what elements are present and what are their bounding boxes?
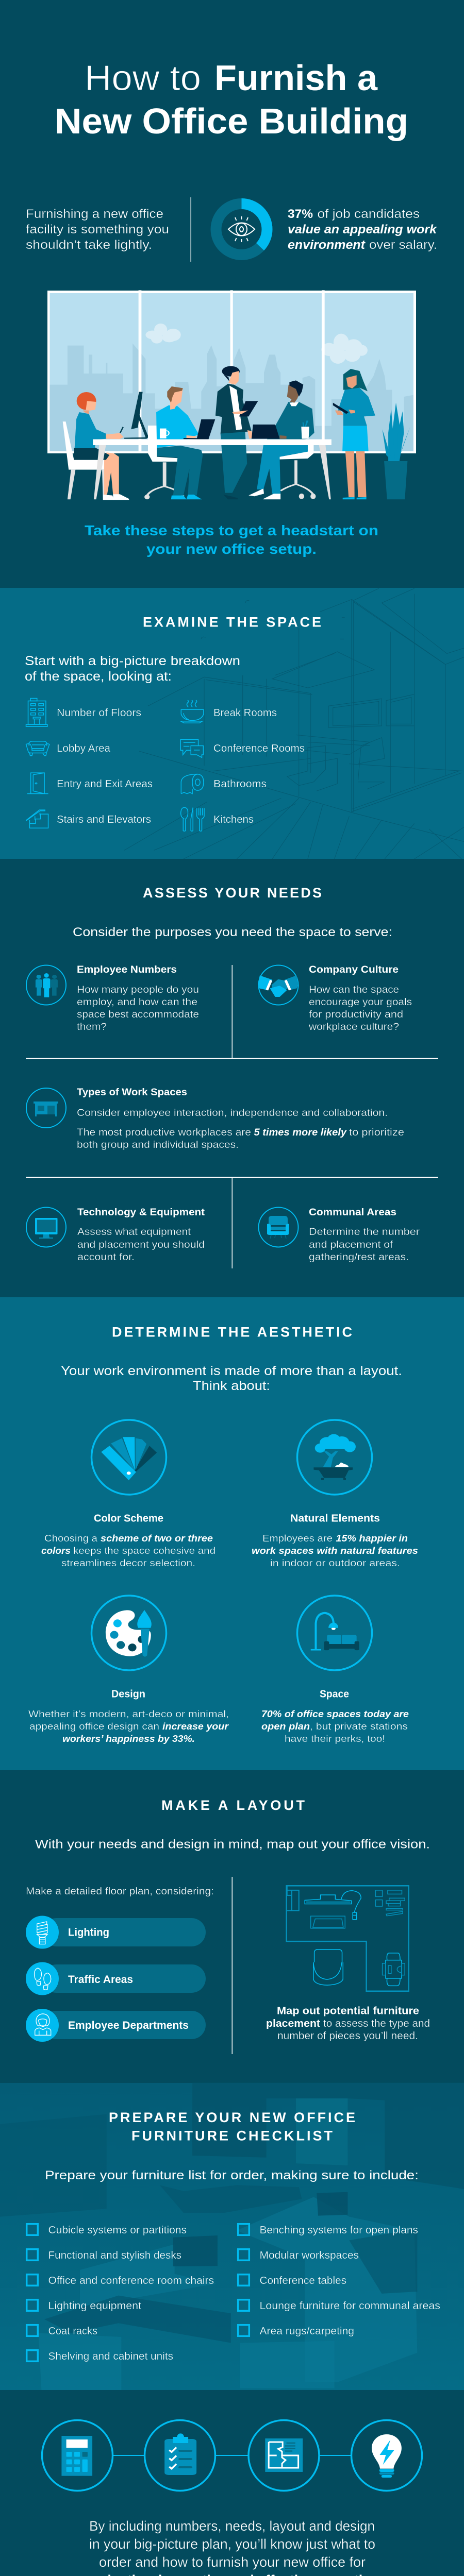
- text: 15% happier in: [336, 1533, 408, 1544]
- text: appealing office design can: [29, 1721, 159, 1732]
- cabinets: [287, 1886, 299, 1910]
- floor plan caption: placement: [266, 2018, 320, 2029]
- person: seated man in blue: [144, 386, 215, 499]
- text: keeps the space cohesive and: [73, 1545, 216, 1556]
- icon: monitor: [124, 392, 148, 439]
- panel: assess your needs: [0, 859, 464, 1297]
- text: streamlines decor selection.: [61, 1557, 195, 1568]
- floor plan drawing: [287, 1886, 409, 1991]
- text: Communal Areas: [309, 1207, 396, 1218]
- conclusion text: order and how to furnish your new office for: [99, 2554, 366, 2570]
- lead text: Start with a big-picture breakdown: [25, 654, 240, 668]
- text: space best accommodate: [77, 1009, 199, 1020]
- text: Consider employee interaction, independence and collaboration.: [77, 1108, 388, 1118]
- icon: footprints: [35, 1968, 51, 1990]
- icon: light bulb: [352, 2420, 422, 2490]
- text: [77, 1207, 205, 1263]
- text: both group and individual spaces.: [77, 1140, 239, 1150]
- person: seated man in sweater: [248, 380, 316, 499]
- icon: coffee cup: [180, 700, 204, 723]
- text: open plan: [261, 1721, 310, 1732]
- text: [309, 1207, 420, 1263]
- text: workplace culture?: [308, 1022, 399, 1032]
- label: Employee Departments: [68, 2020, 189, 2031]
- card: company culture: [258, 964, 412, 1032]
- text: [41, 1533, 216, 1568]
- text: Employees are: [262, 1533, 333, 1544]
- panel: examine the space: [0, 588, 464, 859]
- icon: eye: [228, 216, 255, 242]
- icon: employee: [35, 2014, 51, 2035]
- text: encourage your goals: [309, 997, 412, 1008]
- subheading: take these steps: Take these steps to get a headstart on: [85, 522, 378, 538]
- text: workers’ happiness by 33%.: [62, 1733, 195, 1744]
- text: and placement you should: [77, 1240, 205, 1250]
- icon: door: [27, 773, 48, 794]
- lead text: Prepare your furniture list for order, making sure to include:: [45, 2168, 419, 2182]
- list: spaces right column: Conference Rooms: [213, 743, 305, 754]
- heading: ASSESS YOUR NEEDS: [143, 885, 322, 901]
- text: account for.: [77, 1252, 135, 1263]
- pill: employee departments: [26, 2009, 206, 2042]
- conclusion text: [81, 2518, 383, 2576]
- checklist left column: [27, 2224, 214, 2362]
- lead text: With your needs and design in mind, map out your office vision.: [35, 1837, 430, 1852]
- text: [308, 964, 412, 1032]
- checklist right column: [238, 2224, 440, 2337]
- title: Furnish a: [214, 58, 378, 98]
- label: Space: [320, 1689, 349, 1700]
- title: How to: [85, 58, 201, 98]
- list: spaces right column: Kitchens: [213, 814, 254, 825]
- text: have their perks, too!: [285, 1733, 385, 1744]
- person: woman with red hair: [63, 392, 129, 500]
- text: Determine the number: [309, 1227, 420, 1238]
- text: Technology & Equipment: [77, 1207, 205, 1218]
- checklist right column: Benching systems for open plans: [260, 2225, 418, 2236]
- divider: [232, 1877, 233, 2054]
- label: Design: [111, 1689, 145, 1700]
- stat text: over salary.: [369, 238, 437, 252]
- plant: [383, 403, 410, 499]
- card: types of work spaces: [26, 1087, 404, 1150]
- text: Choosing a: [44, 1533, 98, 1544]
- person: standing woman in blue dress: [333, 369, 375, 499]
- text: scheme of two or three: [101, 1533, 213, 1544]
- icon: desk: [34, 1101, 58, 1116]
- text: 5 times more likely: [254, 1127, 347, 1138]
- list: spaces left column: Entry and Exit Areas: [57, 778, 153, 790]
- item: natural elements: [252, 1420, 418, 1568]
- panel: furniture checklist: [0, 2082, 464, 2390]
- heading: FURNITURE CHECKLIST: [131, 2128, 333, 2143]
- pill: lighting: [26, 1916, 206, 1948]
- illustration: office window: [47, 290, 416, 500]
- text: How many people do you: [77, 985, 199, 995]
- floor plan prompt: Make a detailed floor plan, considering:: [26, 1886, 214, 1897]
- checklist right column: Modular workspaces: [260, 2250, 359, 2261]
- stat text: environment: [288, 238, 366, 252]
- text: employ, and how can the: [77, 997, 197, 1008]
- sofa and coffee table: [305, 1891, 361, 1920]
- list: spaces left column: Lobby Area: [57, 743, 111, 754]
- text: for productivity and: [309, 1009, 403, 1020]
- lead text: of the space, looking at:: [25, 669, 172, 684]
- icon: calculator: [42, 2420, 112, 2490]
- intro text: shouldn’t take lightly.: [26, 238, 152, 252]
- icon: clipboard: [144, 2420, 216, 2490]
- text: Company Culture: [309, 964, 399, 975]
- checklist right column: Lounge furniture for communal areas: [260, 2300, 440, 2312]
- checklist left column: Office and conference room chairs: [48, 2275, 214, 2286]
- shelving: [375, 1890, 405, 1916]
- person: standing woman with tablet: [216, 366, 258, 499]
- checklist left column: Lighting equipment: [48, 2300, 141, 2312]
- title: [55, 58, 408, 141]
- icon: sofa: [26, 741, 49, 756]
- list: spaces left column: Stairs and Elevators: [57, 814, 151, 825]
- text: them?: [77, 1022, 107, 1032]
- donut chart: 37%: [216, 204, 267, 255]
- title: New Office Building: [55, 101, 408, 141]
- intro text: facility is something you: [26, 223, 169, 236]
- label: Traffic Areas: [68, 1974, 133, 1986]
- text: [28, 1708, 229, 1744]
- table: [311, 1916, 345, 1928]
- armchair: [313, 1950, 343, 1985]
- text: , but private stations: [310, 1721, 408, 1732]
- text: Assess what equipment: [77, 1227, 191, 1238]
- icon: bonsai: [313, 1434, 356, 1480]
- icon: monitor: [35, 1218, 58, 1239]
- text: work spaces with natural features: [252, 1545, 418, 1556]
- desk chair: [386, 1953, 402, 1986]
- table: [93, 439, 332, 499]
- text: Types of Work Spaces: [77, 1087, 187, 1098]
- icon: handshake: [258, 975, 299, 997]
- text: colors: [41, 1545, 71, 1556]
- intro text: [26, 207, 169, 252]
- text: to prioritize: [349, 1127, 404, 1138]
- text: [261, 1708, 409, 1744]
- item: space: [261, 1596, 409, 1744]
- checklist left column: Shelving and cabinet units: [48, 2351, 173, 2362]
- label: Color Scheme: [94, 1513, 163, 1524]
- list: spaces right column: Break Rooms: [213, 707, 277, 719]
- panel: intro background: [0, 0, 464, 588]
- label: Lighting: [68, 1927, 109, 1938]
- lead text: Consider the purposes you need the space to serve:: [73, 925, 392, 939]
- subheading: take these steps: [85, 522, 378, 557]
- item: design: [28, 1596, 229, 1744]
- floor plan caption: Map out potential furniture: [277, 2005, 419, 2016]
- icon: lamp and sofa: [311, 1613, 359, 1651]
- text: Whether it’s modern, art-deco or minimal,: [28, 1708, 229, 1719]
- stat text: [288, 207, 438, 252]
- panel: conclusion: [0, 2390, 464, 2576]
- text: in indoor or outdoor areas.: [270, 1557, 400, 1568]
- dividers: [26, 965, 438, 1268]
- lead text: [61, 1364, 402, 1393]
- connectors: [113, 2455, 351, 2456]
- text: increase your: [162, 1721, 229, 1732]
- icon: armchair: [267, 1216, 289, 1239]
- checklist left column: Functional and stylish desks: [48, 2250, 181, 2261]
- heading: [109, 2110, 355, 2143]
- icon: bulb: [37, 1922, 47, 1944]
- lead text: Your work environment is made of more than a layout.: [61, 1364, 402, 1378]
- text: Employee Numbers: [77, 964, 177, 975]
- heading: PREPARE YOUR NEW OFFICE: [109, 2110, 355, 2125]
- heading: EXAMINE THE SPACE: [143, 614, 321, 630]
- list: spaces left column: Number of Floors: [57, 707, 141, 719]
- icon: toilet paper: [181, 774, 204, 794]
- pill: traffic areas: [26, 1962, 206, 1995]
- stat text: 37%: [288, 207, 313, 221]
- text: gathering/rest areas.: [309, 1252, 409, 1263]
- icon: chat bubbles: [180, 739, 203, 757]
- window mullions: [139, 290, 325, 453]
- outline: [287, 1886, 409, 1991]
- floor plan caption: number of pieces you’ll need.: [277, 2030, 418, 2042]
- icon: building: [26, 699, 47, 726]
- icon: blueprint: [248, 2420, 319, 2490]
- list: spaces right column: Bathrooms: [213, 778, 267, 790]
- subheading: take these steps: your new office setup.: [146, 541, 317, 557]
- lead text: [25, 654, 240, 684]
- icon: cutlery: [181, 808, 204, 831]
- floor plan caption: to assess the type and: [323, 2018, 430, 2029]
- panel: determine the aesthetic: [0, 1297, 464, 1770]
- label: Natural Elements: [290, 1513, 380, 1524]
- text: [77, 964, 199, 1032]
- panel: make a layout: [0, 1770, 464, 2083]
- icon: palette: [106, 1610, 152, 1657]
- heading: MAKE A LAYOUT: [161, 1798, 305, 1813]
- text: 70% of office spaces today are: [261, 1708, 409, 1719]
- stat text: value an appealing work: [288, 223, 438, 236]
- card: employee numbers: [26, 964, 199, 1032]
- list: spaces right column: [213, 707, 305, 825]
- intro text: Furnishing a new office: [26, 207, 163, 221]
- skyline: [49, 344, 413, 451]
- checklist right column: Area rugs/carpeting: [260, 2326, 354, 2337]
- background sketch: [124, 588, 464, 859]
- heading: DETERMINE THE AESTHETIC: [112, 1324, 352, 1340]
- card: communal areas: [259, 1207, 420, 1263]
- icon: colour swatches: [101, 1437, 157, 1480]
- icon: stairs: [26, 810, 48, 828]
- floor plan caption: [266, 2005, 430, 2042]
- checklist left column: Coat racks: [48, 2326, 97, 2337]
- item: color scheme: [41, 1420, 216, 1568]
- text: [252, 1533, 418, 1568]
- card: technology and equipment: [26, 1207, 205, 1263]
- text: How can the space: [309, 985, 399, 995]
- lead text: Think about:: [193, 1379, 270, 1393]
- icon: people: [36, 973, 58, 997]
- text: [77, 1087, 404, 1150]
- text: The most productive workplaces are: [77, 1127, 251, 1138]
- checklist right column: Conference tables: [260, 2275, 346, 2286]
- text: and placement of: [309, 1240, 393, 1250]
- list: spaces left column: [57, 707, 153, 825]
- conclusion text: By including numbers, needs, layout and design: [89, 2518, 375, 2534]
- background photo: [0, 2082, 464, 2390]
- stat text: of job candidates: [318, 207, 420, 221]
- clouds: [145, 324, 368, 364]
- conclusion text: in your big-picture plan, you’ll know just what to: [89, 2536, 375, 2552]
- checklist left column: Cubicle systems or partitions: [48, 2225, 187, 2236]
